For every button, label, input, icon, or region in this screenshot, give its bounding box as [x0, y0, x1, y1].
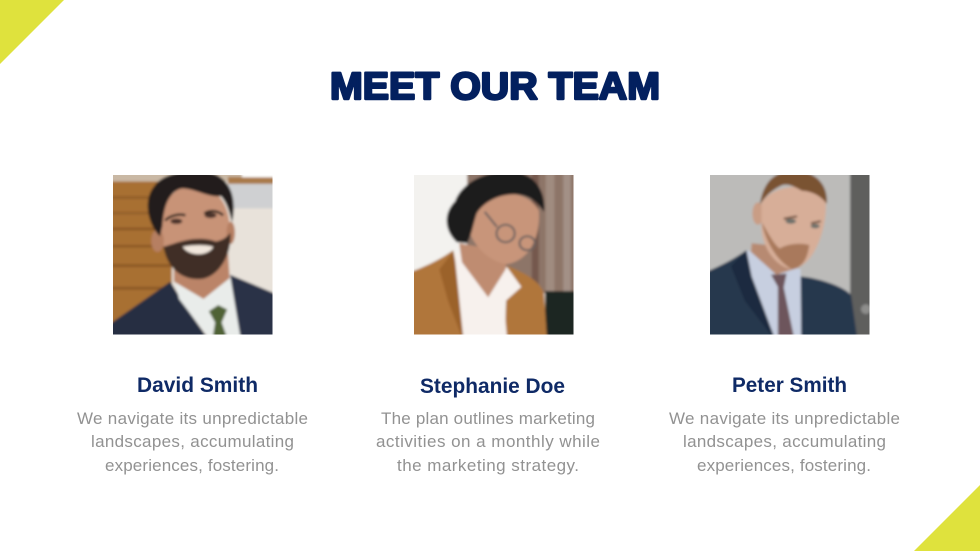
- description: experiences, fostering.: [105, 456, 279, 475]
- description: activities on a monthly while: [376, 432, 600, 451]
- hair: [760, 171, 827, 205]
- glasses: [485, 212, 535, 250]
- face: [467, 194, 539, 264]
- description: We navigate its unpredictable: [77, 409, 308, 428]
- panel: Stephanie Doe: [376, 168, 600, 475]
- smile: [183, 245, 213, 254]
- beard: [761, 222, 809, 269]
- tie: [209, 305, 229, 342]
- decorative corner triangle: bottom right: [914, 485, 980, 551]
- description: landscapes, accumulating: [91, 432, 294, 451]
- description: the marketing strategy.: [397, 456, 579, 475]
- shirt: [174, 273, 241, 342]
- panel: Peter Smith: [669, 168, 900, 475]
- eyes: [784, 216, 821, 223]
- description: [376, 409, 600, 475]
- photo: Stephanie Doe: [414, 175, 574, 334]
- shirt: [746, 250, 801, 342]
- name: David Smith: [137, 374, 258, 397]
- name: Peter Smith: [732, 374, 847, 397]
- shirt: [454, 252, 521, 342]
- decorative corner triangle: top left: [0, 0, 64, 64]
- description: [669, 409, 900, 475]
- description: We navigate its unpredictable: [669, 409, 900, 428]
- suit: [703, 250, 776, 342]
- description: experiences, fostering.: [697, 456, 871, 475]
- neck: [459, 243, 507, 297]
- name: Stephanie Doe: [420, 375, 565, 398]
- hair: [148, 171, 234, 236]
- title: MEET OUR TEAM: [330, 66, 660, 108]
- panel: David Smith: [77, 168, 308, 475]
- hair: [447, 172, 544, 243]
- face: [160, 184, 230, 271]
- suit: [106, 282, 211, 342]
- photo: David Smith: [113, 175, 272, 334]
- photo: Peter Smith: [710, 175, 870, 334]
- description: The plan outlines marketing: [381, 409, 595, 428]
- description: landscapes, accumulating: [683, 432, 886, 451]
- jacket: [407, 250, 471, 342]
- beard: [163, 233, 231, 279]
- description: [77, 409, 308, 475]
- face: [761, 187, 826, 269]
- tie: [771, 274, 795, 342]
- ear: [752, 202, 764, 225]
- eyes and brows: [165, 211, 223, 221]
- neck: [751, 243, 802, 275]
- neck: [174, 252, 230, 299]
